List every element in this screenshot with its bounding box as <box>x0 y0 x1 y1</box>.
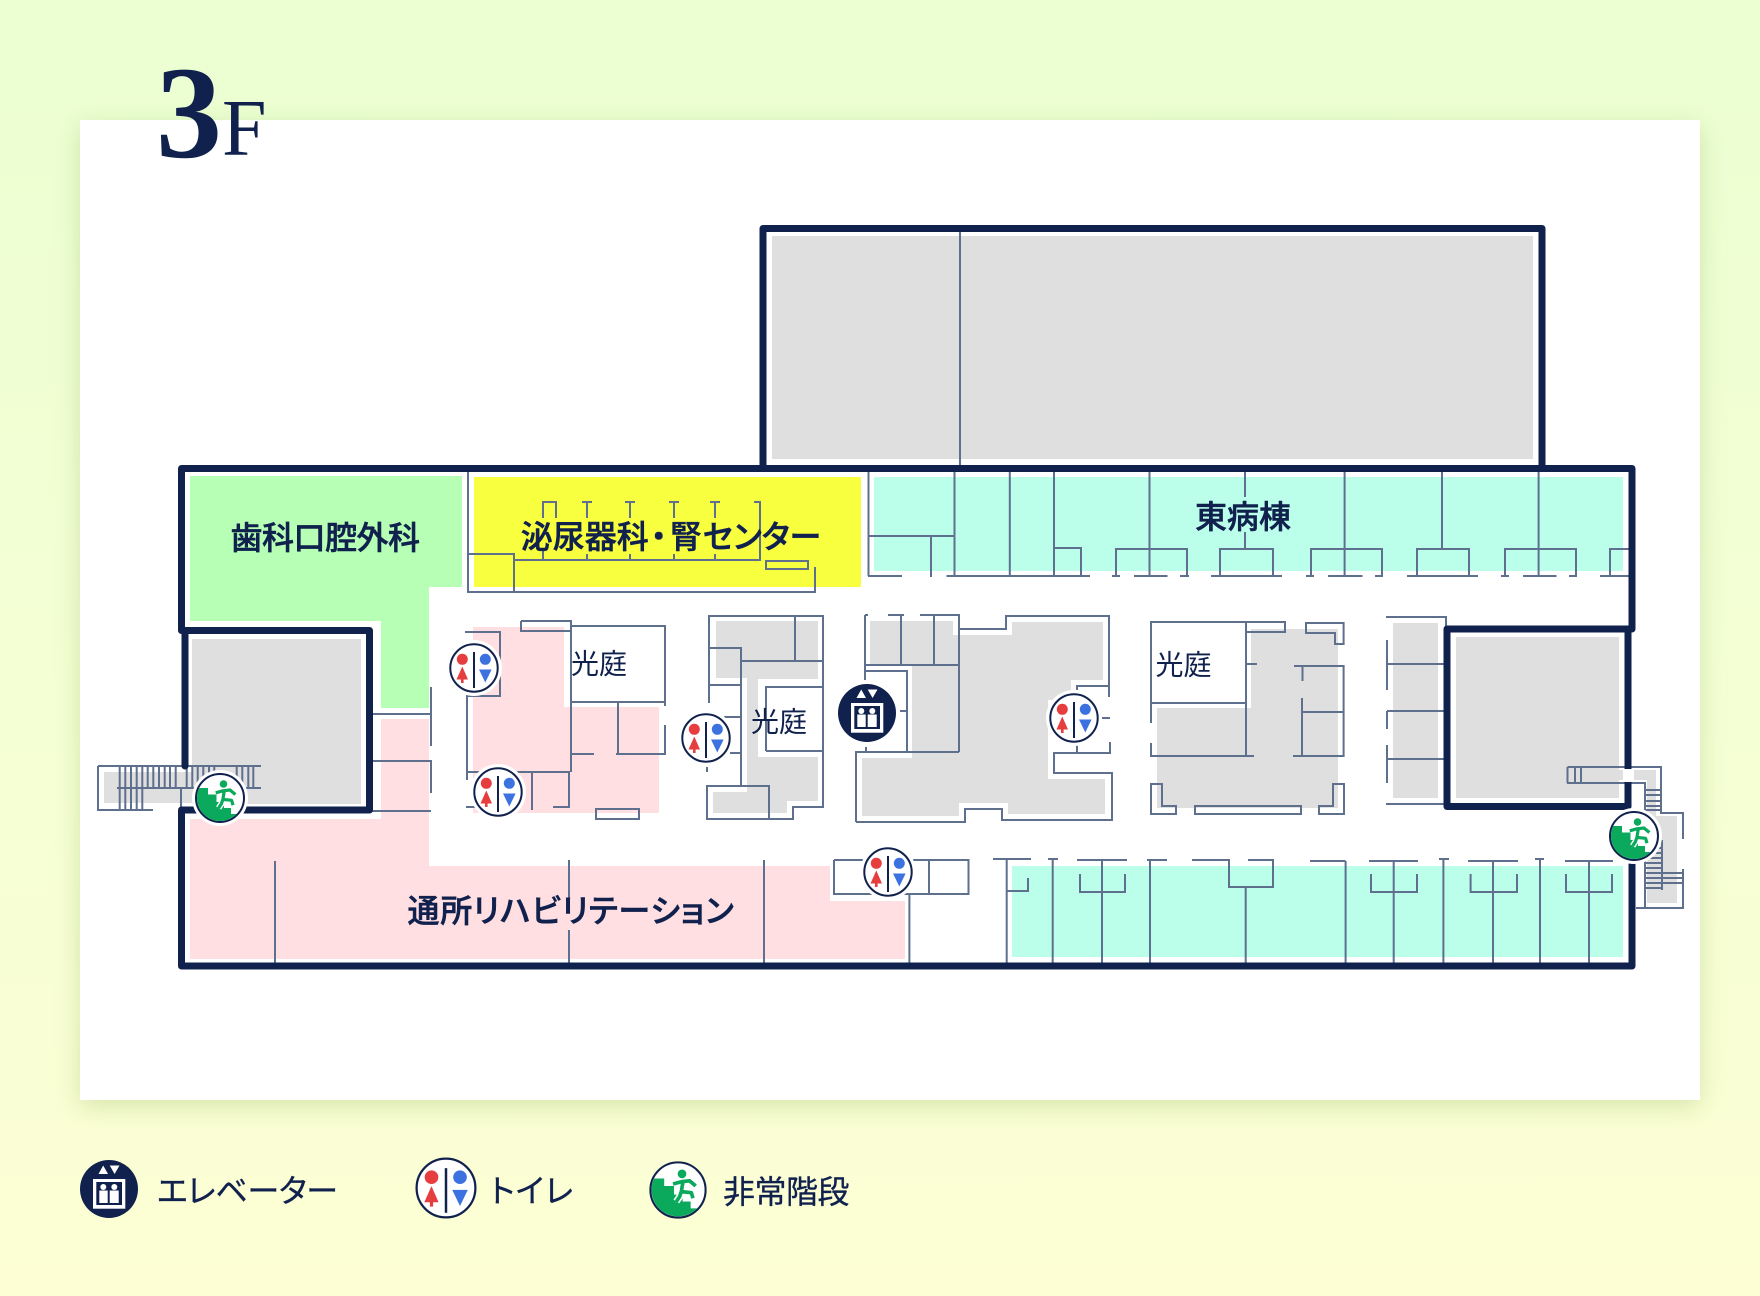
legend <box>80 1159 849 1224</box>
icon: elevator <box>838 684 896 742</box>
floor number: 3F: 3 <box>156 39 222 186</box>
legend text: elevator: エレベーター <box>157 1173 338 1209</box>
wall gap at east stair <box>1623 769 1634 782</box>
label: courtyard east: 光庭 <box>1155 650 1212 680</box>
zone: rehabilitation core area <box>473 627 659 813</box>
floor number: 3F <box>156 39 266 186</box>
zone: dental and oral surgery area <box>190 476 462 708</box>
label: 泌尿器科・腎センター: 泌尿器科・腎センター <box>521 519 821 555</box>
label: courtyard centre: 光庭 <box>751 706 807 738</box>
label: 通所リハビリテーション: 通所リハビリテーション <box>407 893 735 929</box>
legend icon: elevator <box>80 1160 138 1218</box>
zone: east ward north area <box>874 477 1623 571</box>
icon: emergency stairs west <box>192 770 248 828</box>
icon: toilet south-west <box>470 764 526 820</box>
legend text: toilet: トイレ <box>490 1173 574 1209</box>
building outer walls <box>182 228 1632 966</box>
icon: toilet east <box>1046 690 1102 746</box>
icon: toilet south <box>860 844 916 900</box>
map card <box>80 120 1700 1100</box>
zone: urology and kidney center area <box>474 477 861 587</box>
legend text: emergency stairs: 非常階段 <box>723 1174 849 1210</box>
icon: toilet north-west <box>446 640 502 696</box>
icon: emergency stairs east <box>1606 808 1662 866</box>
interior partition walls <box>98 232 1683 966</box>
zone: east ward south area <box>1012 866 1623 957</box>
label: courtyard west: 光庭 <box>571 648 627 680</box>
legend icon: emergency stairs <box>650 1162 706 1224</box>
label: 歯科口腔外科: 歯科口腔外科 <box>230 520 420 556</box>
floor number: 3F: F <box>222 85 266 173</box>
zone: day rehabilitation area <box>190 719 905 959</box>
legend icon: toilet <box>417 1159 475 1217</box>
non-public grey areas <box>104 236 1677 903</box>
icon: toilet centre <box>678 710 734 766</box>
label: 東病棟: 東病棟 <box>1195 499 1291 535</box>
